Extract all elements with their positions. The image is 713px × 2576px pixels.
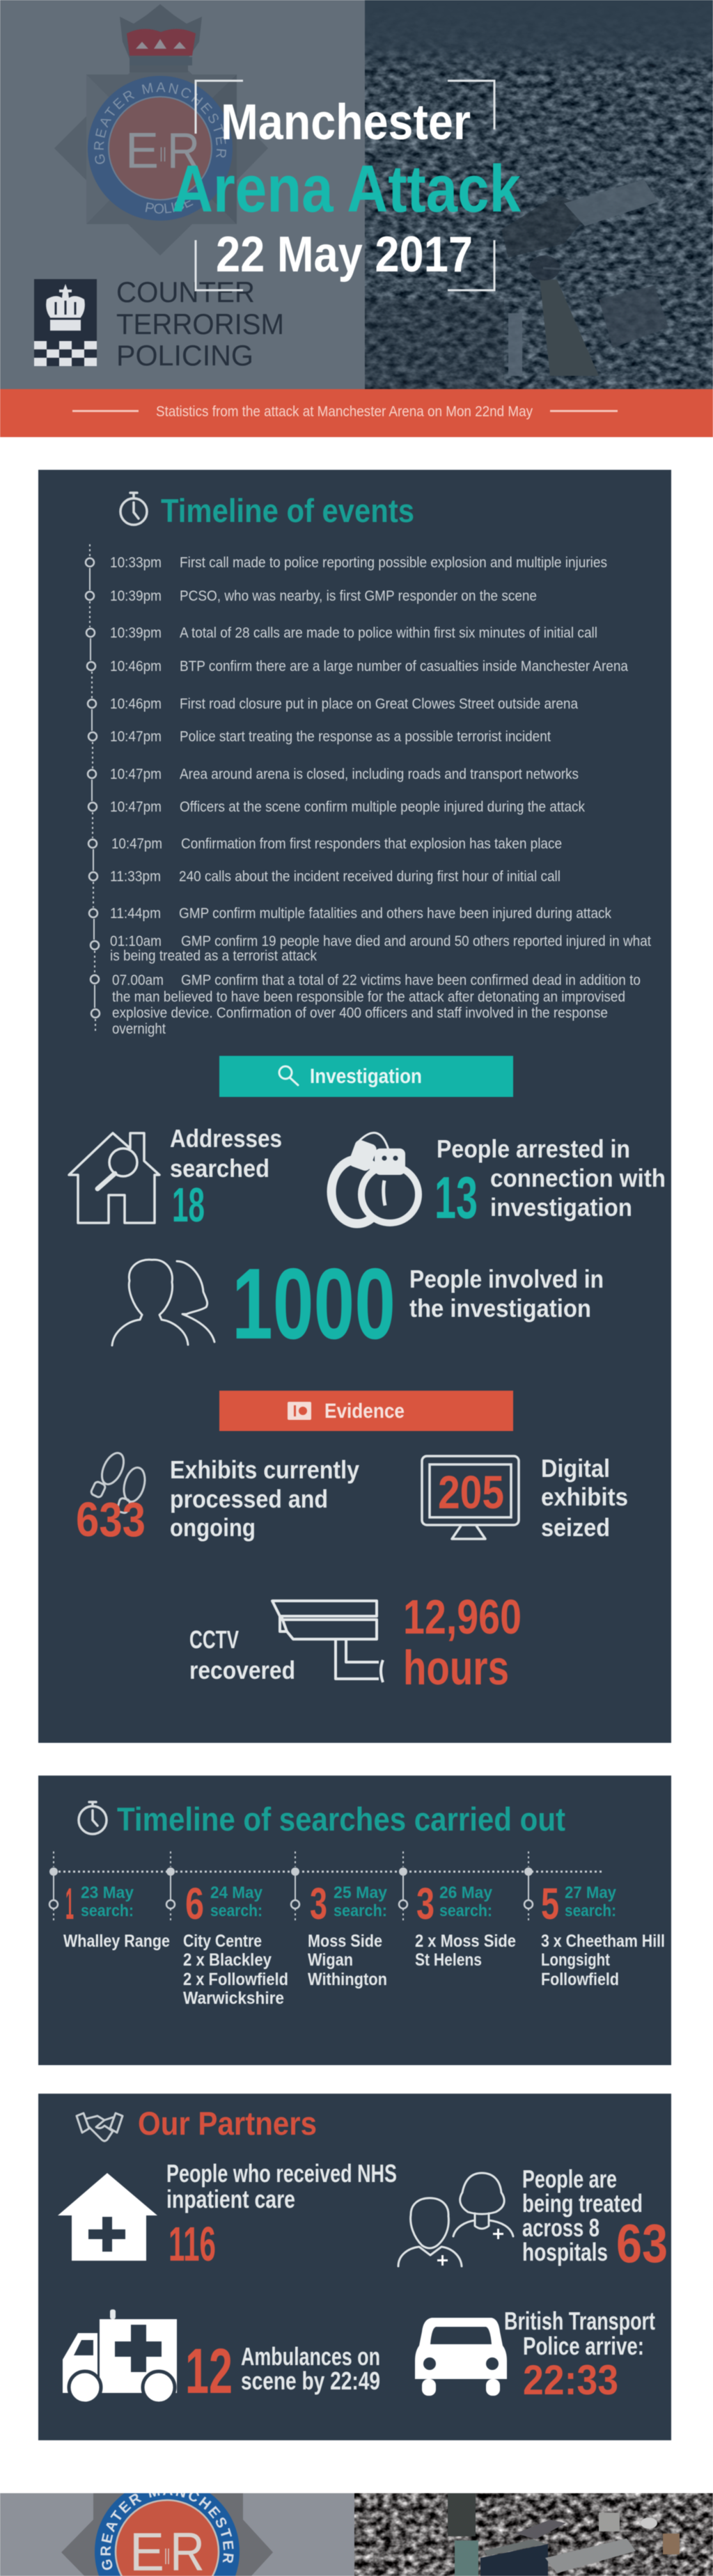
- stat: 12 ambulances: [185, 2336, 380, 2407]
- stat: 63 people treated: People are: [522, 2165, 617, 2193]
- search: 25 May: Wigan: [308, 1950, 353, 1970]
- header banner: [0, 0, 713, 438]
- event list: 240 calls about the incident received during first hour of initial call: [179, 869, 561, 885]
- icon: footprints: [91, 1450, 148, 1514]
- icon: cctv camera: [272, 1601, 383, 1682]
- event list: Police start treating the response as a possible terrorist incident: [180, 729, 551, 745]
- stat: digital exhibits seized: exhibits: [541, 1483, 628, 1511]
- text: counter terrorism policing: [116, 276, 284, 372]
- search: 25 May: Withington: [308, 1970, 387, 1989]
- stat: addresses searched 18: Addresses: [170, 1124, 282, 1153]
- stat: digital exhibits seized: [541, 1454, 628, 1542]
- aerial city photo: [365, 0, 713, 389]
- event list: 10:47pm: [110, 799, 162, 815]
- subtitle band: [0, 389, 713, 437]
- icon: police badge: GREATER MANCHESTER: [100, 2492, 234, 2570]
- stat: people arrested 13: 13: [434, 1165, 478, 1231]
- event list: 07.00am: [112, 972, 164, 988]
- stat: british transport police 22:33: 22:33: [523, 2357, 618, 2403]
- title frame brackets: [196, 81, 494, 290]
- event list: Confirmation from first responders that explosion has taken place: [181, 836, 562, 852]
- stat: 116 nhs inpatient care: inpatient care: [166, 2185, 295, 2213]
- stat: british transport police 22:33: Police arrive:: [523, 2332, 644, 2360]
- event list: PCSO, who was nearby, is first GMP responder on the scene: [180, 588, 537, 604]
- icon: hospital house: [58, 2173, 157, 2261]
- stat: digital exhibits seized: Digital: [541, 1454, 610, 1483]
- stat: 116 nhs inpatient care: 116: [169, 2217, 216, 2271]
- icon: police badge: II: [164, 2544, 170, 2569]
- event list: GMP confirm multiple fatalities and others have been injured during attack: [179, 906, 611, 922]
- stat: 1000 people involved: the investigation: [409, 1294, 591, 1322]
- title: 22 May 2017: [216, 227, 473, 283]
- search: 24 May: 24 May: [210, 1883, 263, 1902]
- event list: GMP confirm 19 people have died and around 50 others reported injured in what: [181, 933, 651, 949]
- icon: police badge: [55, 4, 267, 255]
- event list: A total of 28 calls are made to police within first six minutes of initial call: [180, 625, 597, 641]
- event list: 11:44pm: [110, 906, 161, 922]
- icon: patients: [398, 2173, 513, 2266]
- heading: timeline of events: Timeline of events: [161, 492, 414, 529]
- event list: 10:39pm: [110, 625, 162, 641]
- search: 25 May: Moss Side: [308, 1931, 382, 1951]
- search: 23 May: 1: [65, 1879, 74, 1929]
- text: counter terrorism policing: TERRORISM: [116, 308, 284, 340]
- stat: 12 ambulances: Ambulances on: [241, 2342, 380, 2371]
- event list: Officers at the scene confirm multiple people injured during the attack: [180, 799, 585, 815]
- stat: 63 people treated: 63: [616, 2213, 668, 2274]
- stat: 116 nhs inpatient care: People who received NHS: [166, 2159, 397, 2188]
- event list: 10:47pm: [111, 836, 162, 852]
- stat: 633 exhibits: processed and: [170, 1485, 328, 1513]
- search: 23 May: Whalley Range: [63, 1931, 170, 1951]
- stat: 633 exhibits: [76, 1455, 359, 1547]
- stat: 12 ambulances: scene by 22:49: [241, 2366, 380, 2395]
- search: 25 May: [308, 1879, 388, 1989]
- icon: handshake: [77, 2113, 123, 2141]
- icon: people outline: [112, 1260, 214, 1345]
- icon: house with magnifier: [69, 1133, 159, 1223]
- heading: timeline of searches carried out: Timeline of searches carried out: [117, 1801, 565, 1838]
- event list: is being treated as a terrorist attack: [110, 948, 317, 964]
- search: 23 May: 23 May: [81, 1883, 134, 1902]
- stat: british transport police 22:33: British Transport: [504, 2307, 655, 2335]
- search: 27 May: Longsight: [541, 1950, 611, 1970]
- stat: 116 nhs inpatient care: [166, 2159, 397, 2271]
- title: Manchester: [221, 95, 471, 150]
- stat: 63 people treated: across 8: [522, 2213, 600, 2242]
- icon: monitor with 205: [422, 1456, 519, 1539]
- event list: Area around arena is closed, including roads and transport networks: [180, 766, 579, 782]
- stat: 63 people treated: being treated: [522, 2189, 643, 2218]
- event list: 10:39pm: [110, 588, 162, 604]
- icon: counter terrorism policing logo: [34, 279, 97, 366]
- event list: 01:10am: [110, 933, 162, 949]
- icon: ambulance: [63, 2309, 177, 2403]
- search: 27 May: search:: [565, 1902, 616, 1920]
- heading: our partners: Our Partners: [138, 2105, 317, 2142]
- button: evidence: Evidence: [324, 1400, 405, 1423]
- search: 27 May: 3 x Cheetham Hill: [541, 1931, 665, 1951]
- stat: 633 exhibits: Exhibits currently: [170, 1455, 359, 1484]
- search: 25 May: search:: [334, 1902, 387, 1920]
- title: [172, 95, 522, 283]
- stat: cctv recovered 12,960 hours: 12,960: [403, 1590, 522, 1644]
- icon: handcuffs: [331, 1133, 418, 1224]
- stat: addresses searched 18: 18: [172, 1178, 205, 1232]
- search: 26 May: [415, 1879, 516, 1970]
- search: 26 May: search:: [439, 1902, 492, 1920]
- timeline axis: [86, 544, 100, 1032]
- event list: First call made to police reporting possible explosion and multiple injuries: [180, 555, 607, 571]
- icon: car: [415, 2318, 507, 2396]
- horizontal timeline: [49, 1851, 603, 1923]
- icon: police badge: R: [167, 123, 200, 179]
- search: 24 May: 2 x Followfield: [183, 1970, 288, 1989]
- event list: 10:46pm: [110, 658, 162, 674]
- text: counter terrorism policing: COUNTER: [116, 276, 255, 308]
- search: 24 May: City Centre: [183, 1931, 262, 1951]
- stat: british transport police 22:33: [504, 2307, 655, 2403]
- icon: police badge: II: [159, 143, 166, 166]
- icon: stopwatch: [79, 1802, 107, 1834]
- stat: digital exhibits seized: seized: [541, 1513, 610, 1542]
- stat: cctv recovered 12,960 hours: hours: [403, 1641, 509, 1695]
- event list: the man believed to have been responsible for the attack after detonating an improvised: [112, 989, 625, 1005]
- search: 24 May: [183, 1879, 288, 2008]
- search: 25 May: 25 May: [334, 1883, 388, 1902]
- search: 27 May: 5: [541, 1879, 559, 1929]
- stat: people arrested 13: [434, 1135, 666, 1231]
- search: 26 May: St Helens: [415, 1950, 482, 1970]
- stat: people arrested 13: investigation: [490, 1193, 632, 1222]
- search: 24 May: search:: [210, 1902, 263, 1920]
- stat: addresses searched 18: searched: [170, 1154, 269, 1183]
- event list: First road closure put in place on Great Clowes Street outside arena: [180, 696, 578, 712]
- search: 26 May: 26 May: [439, 1883, 493, 1902]
- button: investigation: Investigation: [310, 1065, 422, 1088]
- event list: 10:33pm: [110, 555, 162, 571]
- stat: people arrested 13: connection with: [490, 1164, 666, 1192]
- stat: people arrested 13: People arrested in: [437, 1135, 630, 1163]
- stat: 1000 people involved: People involved in: [409, 1265, 604, 1293]
- event list: 10:47pm: [110, 766, 162, 782]
- event list: 10:46pm: [110, 696, 162, 712]
- search: 23 May: [63, 1879, 170, 1951]
- icon: stopwatch: [120, 493, 147, 525]
- event list: GMP confirm that a total of 22 victims have been confirmed dead in addition to: [181, 972, 641, 988]
- event list: explosive device. Confirmation of over 400 officers and staff involved in the response: [112, 1005, 608, 1021]
- stat: 12 ambulances: 12: [185, 2336, 233, 2407]
- icon: monitor with 205: 205: [438, 1467, 504, 1519]
- stat: 1000 people involved: [232, 1247, 604, 1360]
- icon: police badge: E: [125, 123, 159, 179]
- search: 24 May: 6: [185, 1879, 204, 1929]
- event list: [110, 555, 651, 1037]
- stat: cctv recovered 12,960 hours: CCTV: [189, 1625, 239, 1654]
- search: 27 May: 27 May: [565, 1883, 617, 1902]
- stat: 63 people treated: hospitals: [522, 2238, 608, 2266]
- stat: 633 exhibits: 633: [76, 1492, 146, 1547]
- panel: grey left background: [0, 0, 365, 389]
- aerial city photo: [354, 2493, 713, 2576]
- button: investigation: [219, 1056, 513, 1097]
- search: 27 May: [541, 1879, 665, 1989]
- search: 24 May: 2 x Blackley: [183, 1950, 272, 1970]
- event list: 10:47pm: [110, 729, 162, 745]
- footer banner: [0, 2492, 713, 2576]
- panel: our partners: [38, 2094, 671, 2440]
- stat: cctv recovered 12,960 hours: recovered: [189, 1656, 295, 1684]
- icon: police badge: POLICE: [145, 200, 194, 214]
- stat: 633 exhibits: ongoing: [170, 1513, 256, 1542]
- text: counter terrorism policing: POLICING: [116, 339, 253, 372]
- search: 26 May: 2 x Moss Side: [415, 1931, 516, 1951]
- search: 25 May: 3: [310, 1879, 327, 1929]
- button: evidence: [219, 1391, 513, 1431]
- search: 23 May: search:: [81, 1902, 134, 1920]
- search: 26 May: 3: [416, 1879, 434, 1929]
- panel: grey left background: [0, 2493, 354, 2576]
- title: Arena Attack: [172, 152, 522, 226]
- stat: addresses searched 18: [170, 1124, 282, 1232]
- stat: 63 people treated: [522, 2165, 668, 2274]
- panel: timeline of events: [38, 470, 671, 1743]
- subtitle band: Statistics from the attack at Manchester Arena on Mon 22nd May: [156, 404, 533, 420]
- search: 24 May: Warwickshire: [183, 1989, 284, 2008]
- event list: BTP confirm there are a large number of casualties inside Manchester Arena: [180, 658, 628, 674]
- stat: cctv recovered 12,960 hours: [189, 1590, 522, 1695]
- event list: overnight: [112, 1021, 166, 1037]
- icon: police badge: GREATER MANCHESTER: [93, 82, 227, 164]
- event list: 11:33pm: [110, 869, 161, 885]
- panel: timeline of searches: [38, 1776, 671, 2065]
- icon: police badge: [61, 2492, 273, 2576]
- search: 27 May: Followfield: [541, 1970, 619, 1989]
- stat: 1000 people involved: 1000: [232, 1247, 395, 1360]
